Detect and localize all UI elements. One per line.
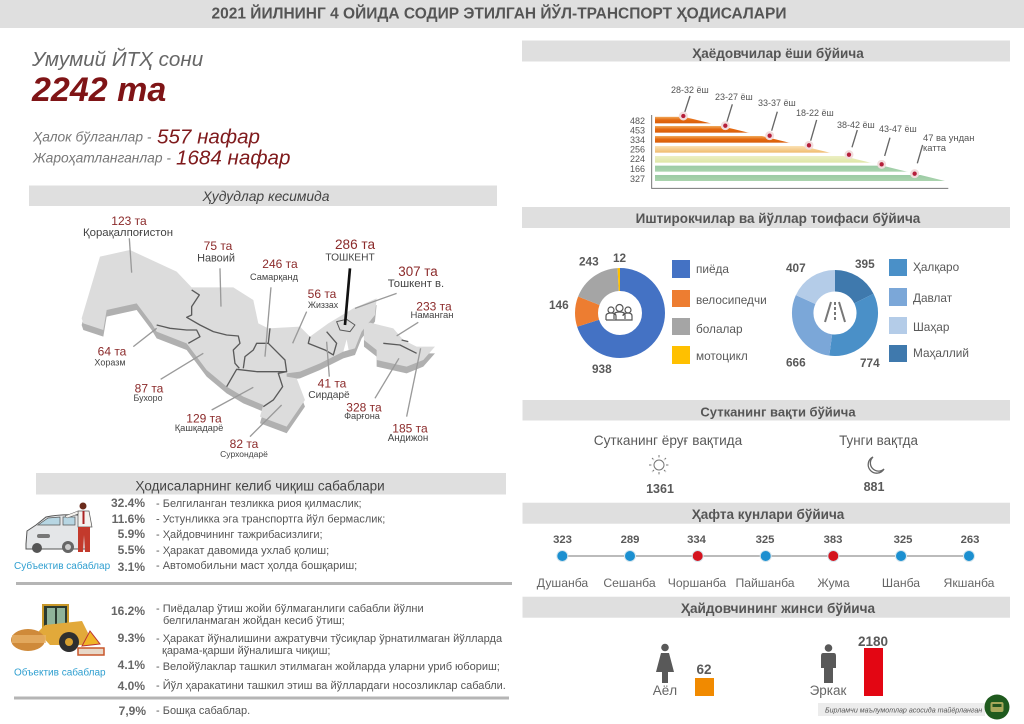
total accidents: Умумий ЙТҲ сони <box>31 48 204 71</box>
icon: people <box>606 304 632 320</box>
heading: regions: Ҳудудлар кесимида <box>202 188 330 204</box>
chart: driver age: 224 <box>630 154 645 164</box>
percentages: objective causes: 16.2% <box>111 604 145 618</box>
map of regions: 129 та <box>186 412 222 426</box>
icon: sun <box>649 455 669 475</box>
chart: days of week: Душанба <box>537 576 588 590</box>
map of regions: Сурхондарё <box>220 449 268 459</box>
map of regions: 328 та <box>346 401 382 415</box>
chart: driver age: 453 <box>630 126 645 136</box>
chart: driver age: 23-27 ёш <box>715 92 753 102</box>
map of regions: 64 та <box>98 345 127 359</box>
map of regions: 87 та <box>135 382 164 396</box>
male drivers: Эркак <box>810 683 847 698</box>
legend: participants: мотоцикл <box>696 349 748 363</box>
total accidents: 2242 та <box>31 71 166 109</box>
icon: logo <box>984 694 1010 720</box>
chart: driver age: катта <box>923 142 947 153</box>
map of regions: 41 та <box>318 377 347 391</box>
title: 2021 ЙИЛНИНГ 4 ОЙИДА СОДИР ЭТИЛГАН ЙЎЛ-ТРАНСПОРТ ҲОДИСАЛАРИ <box>212 4 786 22</box>
daytime accidents: Сутканинг ёруғ вақтида <box>594 433 743 448</box>
heading: days of week: Ҳафта кунлари бўйича <box>692 507 845 522</box>
donut chart: road types: 774 <box>860 356 880 370</box>
daytime accidents: 1361 <box>646 482 674 496</box>
map of regions: Тошкент в. <box>388 278 444 290</box>
percentages: subjective causes: 11.6% <box>112 512 145 526</box>
heading: driver gender: Ҳайдовчининг жинси бўйича <box>681 601 876 616</box>
icon: roads <box>825 302 845 322</box>
total accidents <box>31 48 204 109</box>
icon: car and driver <box>26 502 92 553</box>
text: objective causes: - Йўл ҳаракатини ташкил этиш ва йўллардаги носозликлар сабабли. <box>156 679 506 692</box>
donut chart: participants: 146 <box>549 298 569 312</box>
heading: driver age <box>522 40 1010 62</box>
heading: time of day <box>522 400 1010 420</box>
percentages: subjective causes: 5.9% <box>118 527 145 541</box>
source note <box>818 703 985 716</box>
percentages: subjective causes: 3.1% <box>118 560 145 574</box>
deaths and injuries: 1684 нафар <box>176 146 290 170</box>
donut chart: road types: 666 <box>786 356 806 370</box>
text: subjective causes: - Автомобильни маст ҳолда бошқариш; <box>156 560 357 572</box>
chart: driver age: 38-42 ёш <box>837 120 875 130</box>
donut chart: road types: 407 <box>786 261 806 275</box>
heading: participants and road types: Иштирокчилар ва йўллар тоифаси бўйича <box>636 211 921 226</box>
chart: days of week: 323 <box>553 534 572 546</box>
chart: days of week: Якшанба <box>944 576 995 590</box>
chart: days of week: 383 <box>824 534 842 546</box>
nighttime accidents: Тунги вақтда <box>839 433 918 448</box>
text: subjective causes: - Ҳаракат давомида ухлаб қолиш; <box>156 545 329 557</box>
icon: woman <box>656 644 674 683</box>
donut chart: participants: 12 <box>613 251 627 265</box>
legend: road types: Шаҳар <box>913 320 950 334</box>
map of regions: Сирдарё <box>308 390 350 401</box>
chart: days of week: Сешанба <box>603 576 656 590</box>
legend: road types: Маҳаллий <box>913 346 969 360</box>
legend: road types: Ҳалқаро <box>913 260 960 274</box>
map of regions: Хоразм <box>94 358 126 368</box>
deaths and injuries: Жароҳатланганлар - <box>32 150 171 166</box>
map of regions: 56 та <box>308 287 337 301</box>
map of regions <box>82 214 453 459</box>
heading: causes <box>36 473 506 494</box>
map of regions: Фарғона <box>344 411 381 421</box>
text: objective causes: қарама-қарши йўналишга чиқиш; <box>162 645 330 657</box>
chart: days of week: Жума <box>817 576 850 590</box>
percentages: objective causes: 9.3% <box>118 631 145 645</box>
map of regions: 307 та <box>398 264 438 279</box>
donut chart: participants <box>549 251 654 376</box>
map of regions: 82 та <box>230 437 259 451</box>
icon: road roller <box>11 605 104 655</box>
donut chart: road types <box>786 257 880 370</box>
heading: participants and road types <box>522 207 1010 228</box>
chart: days of week: 263 <box>961 534 979 546</box>
label: subjective causes: Субъектив сабаблар <box>14 560 111 572</box>
map of regions: 75 та <box>204 239 233 253</box>
legend: road types <box>889 259 969 362</box>
chart: days of week <box>537 534 995 590</box>
donut chart: participants: 938 <box>592 362 612 376</box>
other causes <box>119 704 250 718</box>
map of regions: 286 та <box>335 237 375 252</box>
legend: participants: пиёда <box>696 262 729 276</box>
percentages: subjective causes <box>111 496 145 574</box>
text: objective causes: - Ҳаракат йўналишини ажратувчи тўсиқлар ўрнатилмаган йўлларда <box>156 633 503 645</box>
heading: causes: Ҳодисаларнинг келиб чиқиш сабаблари <box>135 478 385 494</box>
text: objective causes: - Пиёдалар ўтиш жойи бўлмаганлиги сабабли йўлни <box>156 603 424 615</box>
chart: days of week: 289 <box>621 534 639 546</box>
chart: driver age: 334 <box>630 135 645 145</box>
donut chart: participants: 243 <box>579 254 599 268</box>
chart: driver age: 256 <box>630 144 645 154</box>
map of regions: Жиззах <box>308 300 339 310</box>
text: subjective causes: - Ҳайдовчининг тажрибасизлиги; <box>156 529 323 541</box>
text: objective causes <box>156 603 506 692</box>
female drivers: 62 <box>696 662 712 677</box>
heading: days of week <box>522 503 1010 524</box>
label: objective causes: Объектив сабаблар <box>14 667 106 679</box>
nighttime accidents <box>839 433 918 494</box>
map of regions: Навоий <box>197 253 235 265</box>
heading: time of day: Сутканинг вақти бўйича <box>700 404 856 420</box>
deaths and injuries: 557 нафар <box>157 126 260 148</box>
text: subjective causes: - Устунликка эга транспортга йўл бермаслик; <box>156 514 385 526</box>
chart: days of week: 334 <box>687 534 707 546</box>
donut chart: road types: 395 <box>855 257 875 271</box>
map of regions: Қорақалпоғистон <box>83 227 173 239</box>
deaths and injuries <box>32 126 290 170</box>
other causes: 7,9% <box>119 704 146 718</box>
female drivers <box>653 644 714 698</box>
chart: driver age: 47 ва ундан <box>923 132 974 143</box>
source note: Бирламчи маълумотлар асосида тайёрланган <box>825 706 982 714</box>
title <box>0 0 1024 28</box>
chart: days of week: Пайшанба <box>735 576 795 590</box>
map of regions: Наманган <box>410 310 454 321</box>
icon: man <box>821 644 836 683</box>
chart: driver age: 33-37 ёш <box>758 98 796 108</box>
legend: participants: болалар <box>696 322 743 336</box>
map of regions: 233 та <box>416 300 452 314</box>
chart: driver age: 327 <box>630 174 645 184</box>
chart: driver age: 166 <box>630 164 645 174</box>
legend: participants: велосипедчи <box>696 293 767 307</box>
map of regions: 185 та <box>392 422 428 436</box>
text: objective causes: - Велойўлаклар ташкил этилмаган жойларда уларни уриб юбориш; <box>156 661 500 673</box>
percentages: objective causes: 4.0% <box>118 679 145 693</box>
heading: regions <box>29 186 497 206</box>
female drivers: Аёл <box>653 683 677 698</box>
map of regions: Самарқанд <box>250 272 299 282</box>
chart: driver age: 18-22 ёш <box>796 108 834 118</box>
map of regions: 246 та <box>262 257 298 271</box>
deaths and injuries: Ҳалок бўлганлар - <box>32 130 152 144</box>
percentages: objective causes <box>111 604 145 693</box>
chart: days of week: Шанба <box>882 576 920 590</box>
male drivers: 2180 <box>858 634 888 649</box>
map of regions: ТОШКЕНТ <box>325 253 375 264</box>
map of regions: 123 та <box>111 214 147 228</box>
heading: driver age: Ҳаёдовчилар ёши бўйича <box>692 46 864 61</box>
chart: driver age: 28-32 ёш <box>671 85 709 95</box>
chart: driver age <box>630 85 974 188</box>
icon: moon <box>868 457 884 473</box>
percentages: objective causes: 4.1% <box>118 658 145 672</box>
chart: days of week: Чоршанба <box>668 576 726 590</box>
text: subjective causes: - Белгиланган тезликка риоя қилмаслик; <box>156 498 362 510</box>
chart: driver age: 43-47 ёш <box>879 124 917 134</box>
other causes: - Бошқа сабаблар. <box>156 705 250 717</box>
chart: days of week: 325 <box>756 534 774 546</box>
nighttime accidents: 881 <box>864 480 884 494</box>
legend: road types: Давлат <box>913 291 953 305</box>
percentages: subjective causes: 5.5% <box>118 543 145 557</box>
daytime accidents <box>594 433 743 496</box>
map of regions: Андижон <box>388 433 428 444</box>
chart: driver age: 482 <box>630 116 645 126</box>
heading: driver gender <box>522 597 1010 618</box>
legend: participants <box>672 260 767 364</box>
male drivers <box>810 634 888 698</box>
map of regions: Қашқадарё <box>175 422 223 433</box>
chart: days of week: 325 <box>894 534 912 546</box>
text: objective causes: белгиланмаган жойдан кесиб ўтиш; <box>163 615 345 627</box>
map of regions: Бухоро <box>134 393 163 403</box>
percentages: subjective causes: 32.4% <box>111 496 145 510</box>
text: subjective causes <box>156 498 385 572</box>
